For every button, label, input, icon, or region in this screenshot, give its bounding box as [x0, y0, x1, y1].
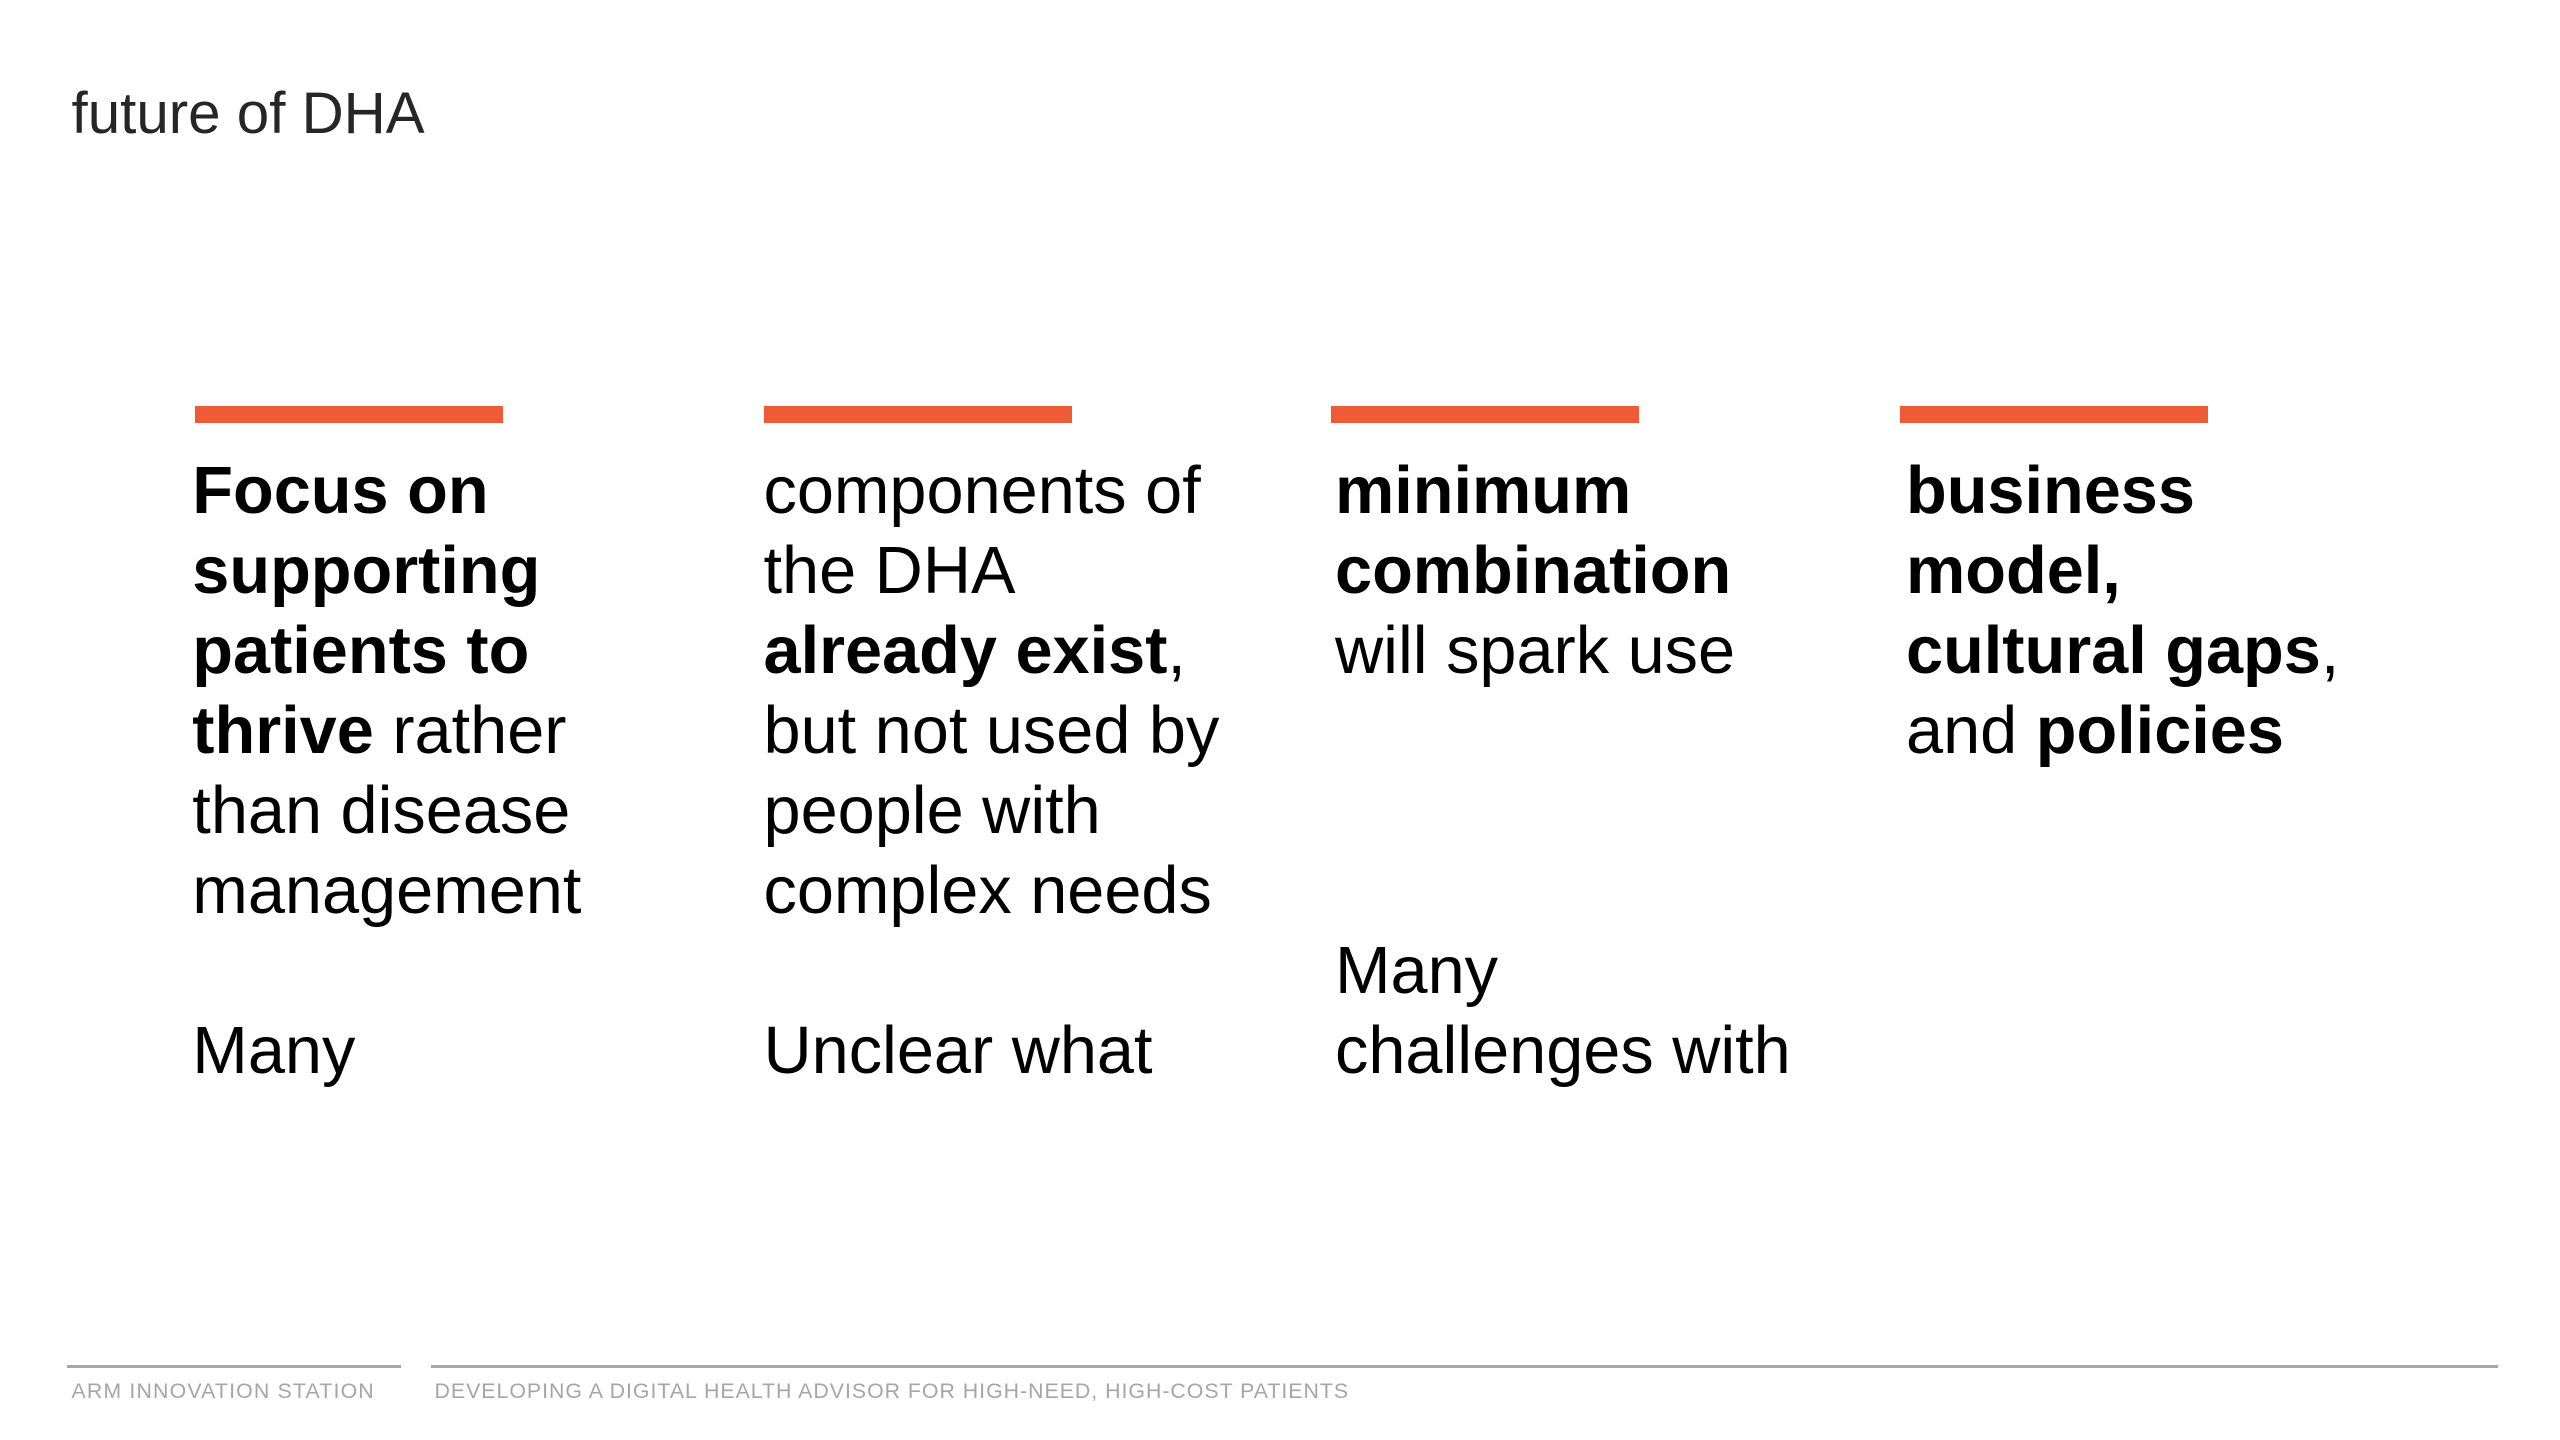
- panel: column 2 text: [764, 454, 1220, 1088]
- panel: column 1 text: [192, 454, 581, 1088]
- footer rule right: [431, 1365, 2498, 1368]
- panel: column 3 text: challenges with: [1335, 1014, 1791, 1088]
- panel: column 1 text: Focus on: [192, 454, 489, 528]
- panel: column 2 text: already exist,: [764, 614, 1186, 688]
- panel: column 2 accent bar: [764, 406, 1072, 423]
- panel: column 1 text: than disease: [192, 774, 570, 848]
- panel: column 2 text: Unclear what: [764, 1014, 1153, 1088]
- panel: column 1 text: supporting: [192, 534, 540, 608]
- panel: column 3 text: minimum: [1335, 454, 1631, 528]
- panel: column 3 text: will spark use: [1335, 614, 1735, 688]
- footer rule left: [67, 1365, 401, 1368]
- title: future of DHA: [72, 81, 425, 146]
- panel: column 3 text: combination: [1335, 534, 1731, 608]
- panel: column 2 text: but not used by: [764, 694, 1219, 768]
- panel: column 4 text: model,: [1906, 534, 2121, 608]
- panel: column 4 accent bar: [1900, 406, 2208, 423]
- panel: column 4 text: [1906, 454, 2339, 768]
- panel: column 2 text: people with: [764, 774, 1101, 848]
- panel: column 2 text: the DHA: [764, 534, 1015, 608]
- panel: column 2 text: complex needs: [764, 854, 1212, 928]
- panel: column 1 text: thrive rather: [192, 694, 566, 768]
- panel: column 3 accent bar: [1331, 406, 1639, 423]
- panel: column 3 text: [1334, 454, 1791, 1088]
- panel: column 4 text: and policies: [1906, 694, 2284, 768]
- panel: column 1 accent bar: [194, 406, 502, 423]
- panel: column 4 text: cultural gaps,: [1906, 614, 2339, 688]
- panel: column 1 text: Many: [192, 1014, 355, 1088]
- footer label left: ARM INNOVATION STATION: [72, 1379, 375, 1403]
- panel: column 2 text: components of: [764, 454, 1201, 528]
- panel: column 3 text: Many: [1335, 934, 1498, 1008]
- panel: column 4 text: business: [1906, 454, 2195, 528]
- footer label right: DEVELOPING A DIGITAL HEALTH ADVISOR FOR HIGH-NEED, HIGH-COST PATIENTS: [434, 1379, 1349, 1403]
- panel: column 1 text: patients to: [192, 614, 529, 688]
- panel: column 1 text: management: [192, 854, 581, 928]
